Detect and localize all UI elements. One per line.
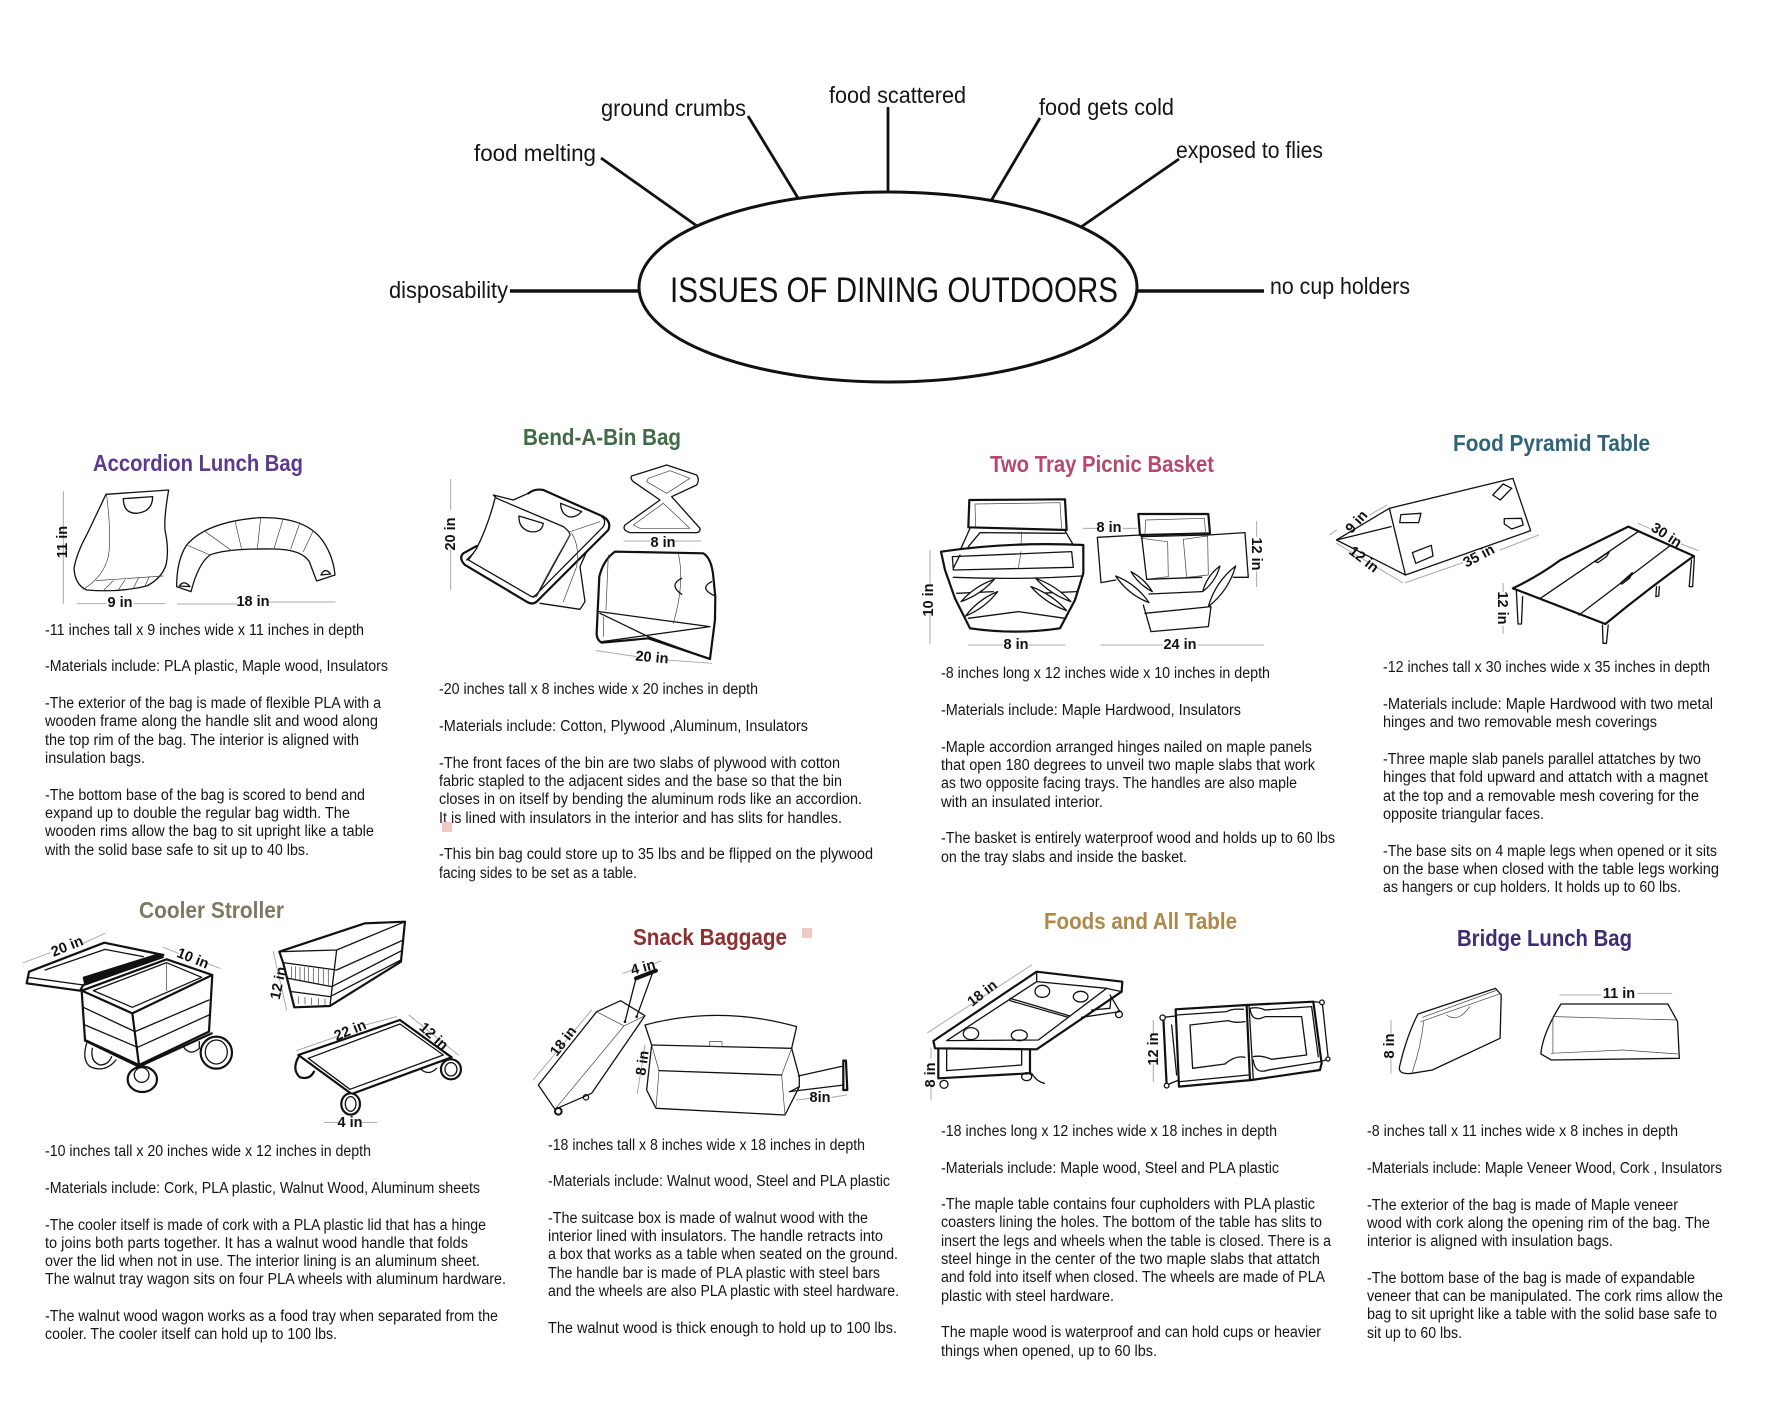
- specification text: [1383, 659, 1719, 896]
- illustration: accordion bag: [63, 490, 335, 604]
- mind map: issues of dining outdoors: [389, 82, 1410, 382]
- specification text: -The walnut wood wagon works as a food tray when separated from the: [45, 1308, 498, 1325]
- central title: ISSUES OF DINING OUTDOORS: [670, 271, 1118, 310]
- dimension: 18 in: 18 in: [965, 977, 1001, 1010]
- heading: Bridge Lunch Bag: [1457, 925, 1632, 951]
- specification text: insert the legs and wheels when the table is closed. There is a: [941, 1233, 1331, 1250]
- specification text: The handle bar is made of PLA plastic with steel bars: [548, 1265, 880, 1282]
- specification text: -Materials include: PLA plastic, Maple wood, Insulators: [45, 658, 388, 675]
- specification text: -Materials include: Maple Hardwood, Insulators: [941, 702, 1241, 719]
- specification text: [940, 665, 1335, 866]
- dimension: 8 in: 8 in: [1004, 637, 1028, 653]
- illustration: bend-a-bin bag: [451, 465, 715, 663]
- specification text: -The maple table contains four cupholders with PLA plastic: [941, 1196, 1315, 1213]
- issue label: exposed to flies: exposed to flies: [1176, 137, 1323, 163]
- illustration: picnic basket: [930, 499, 1263, 645]
- specification text: coasters lining the holes. The bottom of the table has slits to: [941, 1214, 1322, 1231]
- panel: Bridge Lunch Bag: [1366, 925, 1723, 1342]
- panel: Snack Baggage: [533, 924, 899, 1337]
- issue label: no cup holders: no cup holders: [1270, 273, 1410, 299]
- specification text: opposite triangular faces.: [1383, 806, 1544, 823]
- illustration: foods and all table: [928, 965, 1330, 1100]
- specification text: [45, 1143, 506, 1343]
- specification text: -The exterior of the bag is made of flexible PLA with a: [45, 695, 381, 712]
- heading: Cooler Stroller: [139, 897, 284, 923]
- specification text: -This bin bag could store up to 35 lbs and be flipped on the plywood: [439, 846, 873, 863]
- panel: Foods and All Table: [923, 908, 1331, 1360]
- panel: Two Tray Picnic Basket: [921, 451, 1335, 866]
- specification text: -18 inches long x 12 inches wide x 18 inches in depth: [941, 1123, 1277, 1140]
- specification text: the top rim of the bag. The interior is aligned with: [45, 732, 359, 749]
- specification text: -Materials include: Maple wood, Steel and PLA plastic: [941, 1160, 1279, 1177]
- specification text: wooden rims allow the bag to sit upright like a table: [44, 823, 374, 840]
- dimension: 12 in: 12 in: [268, 965, 290, 1001]
- specification text: with an insulated interior.: [940, 794, 1103, 811]
- dimension: 8 in: 8 in: [633, 1050, 653, 1077]
- illustration: cooler stroller: [23, 922, 461, 1122]
- issue label: disposability: disposability: [389, 277, 508, 303]
- specification text: hinges that fold upward and attatch with a magnet: [1383, 769, 1709, 786]
- specification text: [44, 622, 388, 859]
- specification text: [439, 681, 873, 882]
- dimension: 18 in: 18 in: [236, 594, 270, 610]
- specification text: -Materials include: Maple Veneer Wood, Cork , Insulators: [1367, 1160, 1722, 1177]
- panel: Cooler Stroller: [23, 897, 506, 1343]
- specification text: [1366, 1123, 1723, 1342]
- specification text: veneer that can be manipulated. The cork rims allow the: [1367, 1288, 1723, 1305]
- heading: Bend-A-Bin Bag: [523, 424, 681, 450]
- specification text: -10 inches tall x 20 inches wide x 12 inches in depth: [45, 1143, 371, 1160]
- specification text: -The bottom base of the bag is made of expandable: [1367, 1270, 1695, 1287]
- heading: Accordion Lunch Bag: [93, 450, 303, 476]
- specification text: wood with cork along the opening rim of the bag. The: [1366, 1215, 1710, 1232]
- specification text: cooler. The cooler itself can hold up to 100 lbs.: [45, 1326, 337, 1343]
- specification text: interior is aligned with insulation bags.: [1367, 1233, 1613, 1250]
- specification text: plastic with steel hardware.: [941, 1288, 1114, 1305]
- panel: Bend-A-Bin Bag: [439, 424, 873, 882]
- dimension: 4 in: 4 in: [629, 957, 657, 979]
- issue label: food melting: food melting: [474, 140, 596, 166]
- dimension: 8 in: 8 in: [923, 1063, 939, 1087]
- specification text: The walnut tray wagon sits on four PLA wheels with aluminum hardware.: [45, 1271, 506, 1288]
- specification text: expand up to double the regular bag width. The: [45, 805, 350, 822]
- specification text: facing sides to be set as a table.: [439, 865, 637, 882]
- dimension: 8 in: 8 in: [1382, 1034, 1398, 1058]
- specification text: It is lined with insulators in the interior and has slits for handles.: [439, 810, 842, 827]
- central ellipse: [639, 192, 1137, 382]
- specification text: -The base sits on 4 maple legs when opened or it sits: [1383, 843, 1717, 860]
- dimension: 10 in: 10 in: [921, 583, 937, 617]
- specification text: -Materials include: Walnut wood, Steel and PLA plastic: [548, 1173, 890, 1190]
- specification text: things when opened, up to 60 lbs.: [941, 1343, 1157, 1360]
- specification text: that open 180 degrees to unveil two maple slabs that work: [941, 757, 1315, 774]
- specification text: [941, 1123, 1331, 1360]
- specification text: as two opposite facing trays. The handles are also maple: [941, 775, 1297, 792]
- dimension: 20 in: 20 in: [443, 517, 459, 551]
- dimension: 22 in: 22 in: [332, 1017, 369, 1045]
- specification text: -Materials include: Maple Hardwood with two metal: [1383, 696, 1713, 713]
- specification text: and fold into itself when closed. The wheels are made of PLA: [941, 1269, 1326, 1286]
- dimension: 12 in: 12 in: [1248, 537, 1264, 571]
- dimension: 8 in: 8 in: [1097, 520, 1121, 536]
- specification text: hinges and two removable mesh coverings: [1383, 714, 1657, 731]
- specification text: -18 inches tall x 8 inches wide x 18 inches in depth: [548, 1137, 865, 1154]
- specification text: closes in on itself by bending the aluminum rods like an accordion.: [439, 791, 862, 808]
- dimension: 20 in: 20 in: [635, 649, 669, 667]
- dimension: 12 in: 12 in: [1494, 591, 1510, 625]
- specification text: -Three maple slab panels parallel attatches by two: [1383, 751, 1701, 768]
- illustration: pyramid table: [1330, 478, 1698, 643]
- specification text: and the wheels are also PLA plastic with steel hardware.: [548, 1283, 899, 1300]
- specification text: insulation bags.: [45, 750, 145, 767]
- illustration: bridge lunch bag: [1391, 988, 1679, 1074]
- specification text: -The exterior of the bag is made of Maple veneer: [1367, 1197, 1678, 1214]
- specification text: -12 inches tall x 30 inches wide x 35 inches in depth: [1383, 659, 1710, 676]
- specification text: -8 inches long x 12 inches wide x 10 inches in depth: [941, 665, 1270, 682]
- specification text: -11 inches tall x 9 inches wide x 11 inches in depth: [45, 622, 364, 639]
- specification text: -The suitcase box is made of walnut wood with the: [548, 1210, 868, 1227]
- specification text: wooden frame along the handle slit and wood along: [44, 713, 378, 730]
- specification text: -The cooler itself is made of cork with a PLA plastic lid that has a hinge: [45, 1217, 486, 1234]
- specification text: -The basket is entirely waterproof wood and holds up to 60 lbs: [941, 830, 1335, 847]
- specification text: steel hinge in the center of the two maple slabs that attatch: [941, 1251, 1320, 1268]
- specification text: The maple wood is waterproof and can hold cups or heavier: [941, 1324, 1321, 1341]
- heading: Food Pyramid Table: [1453, 430, 1650, 456]
- dimension: 18 in: 18 in: [547, 1024, 580, 1060]
- issue label: ground crumbs: ground crumbs: [601, 95, 746, 121]
- dimension: 20 in: 20 in: [49, 933, 86, 961]
- spoke lines: [510, 107, 1264, 291]
- dimension: 12 in: 12 in: [416, 1020, 451, 1054]
- specification text: -The bottom base of the bag is scored to bend and: [45, 787, 365, 804]
- specification text: sit up to 60 lbs.: [1367, 1325, 1462, 1342]
- dimension: 35 in: 35 in: [1461, 542, 1497, 571]
- dimension: 12 in: 12 in: [1346, 543, 1381, 576]
- dimension: 8 in: 8 in: [651, 535, 675, 551]
- specification text: The walnut wood is thick enough to hold up to 100 lbs.: [548, 1320, 897, 1337]
- specification text: -The front faces of the bin are two slabs of plywood with cotton: [439, 755, 840, 772]
- specification text: [548, 1137, 899, 1337]
- specification text: interior lined with insulators. The handle retracts into: [548, 1228, 883, 1245]
- stray marker: [442, 822, 452, 832]
- specification text: to joins both parts together. It has a walnut wood handle that folds: [45, 1235, 468, 1252]
- dimension: 30 in: 30 in: [1648, 520, 1684, 551]
- heading: Snack Baggage: [633, 924, 787, 950]
- heading: Foods and All Table: [1044, 908, 1237, 934]
- dimension: 11 in: 11 in: [1603, 986, 1635, 1002]
- dimension: 9 in: 9 in: [1343, 508, 1371, 537]
- dimension: 11 in: 11 in: [55, 526, 71, 558]
- specification text: with the solid base safe to sit up to 40 lbs.: [44, 842, 309, 859]
- dimension: 12 in: 12 in: [1146, 1032, 1162, 1066]
- specification text: on the tray slabs and inside the basket.: [941, 849, 1187, 866]
- specification text: fabric stapled to the adjacent sides and the base so that the bin: [439, 773, 842, 790]
- panel: Accordion Lunch Bag: [44, 450, 388, 859]
- issue label: food scattered: food scattered: [829, 82, 966, 108]
- specification text: -8 inches tall x 11 inches wide x 8 inches in depth: [1367, 1123, 1678, 1140]
- specification text: -Materials include: Cork, PLA plastic, Walnut Wood, Aluminum sheets: [45, 1180, 480, 1197]
- issue label: food gets cold: food gets cold: [1039, 94, 1174, 120]
- specification text: on the base when closed with the table legs working: [1383, 861, 1719, 878]
- panel: Food Pyramid Table: [1330, 430, 1719, 896]
- specification text: -Materials include: Cotton, Plywood ,Aluminum, Insulators: [439, 718, 808, 735]
- dimension: 8 in: 8in: [810, 1090, 830, 1106]
- stray marker: [802, 928, 812, 938]
- specification text: bag to sit upright like a table with the solid base safe to: [1367, 1306, 1717, 1323]
- dimension: 4 in: 4 in: [338, 1115, 362, 1131]
- illustration: snack baggage: [533, 961, 847, 1115]
- dimension: 9 in: 9 in: [108, 595, 132, 611]
- heading: Two Tray Picnic Basket: [990, 451, 1214, 477]
- dimension: 24 in: 24 in: [1163, 637, 1197, 653]
- specification text: as hangers or cup holders. It holds up to 60 lbs.: [1383, 879, 1681, 896]
- specification text: at the top and a removable mesh covering for the: [1383, 788, 1699, 805]
- specification text: -20 inches tall x 8 inches wide x 20 inches in depth: [439, 681, 758, 698]
- specification text: -Maple accordion arranged hinges nailed on maple panels: [941, 739, 1312, 756]
- dimension: 10 in: 10 in: [174, 945, 211, 973]
- specification text: over the lid when not in use. The interior lining is an aluminum sheet.: [45, 1253, 480, 1270]
- specification text: a box that works as a table when seated on the ground.: [548, 1246, 898, 1263]
